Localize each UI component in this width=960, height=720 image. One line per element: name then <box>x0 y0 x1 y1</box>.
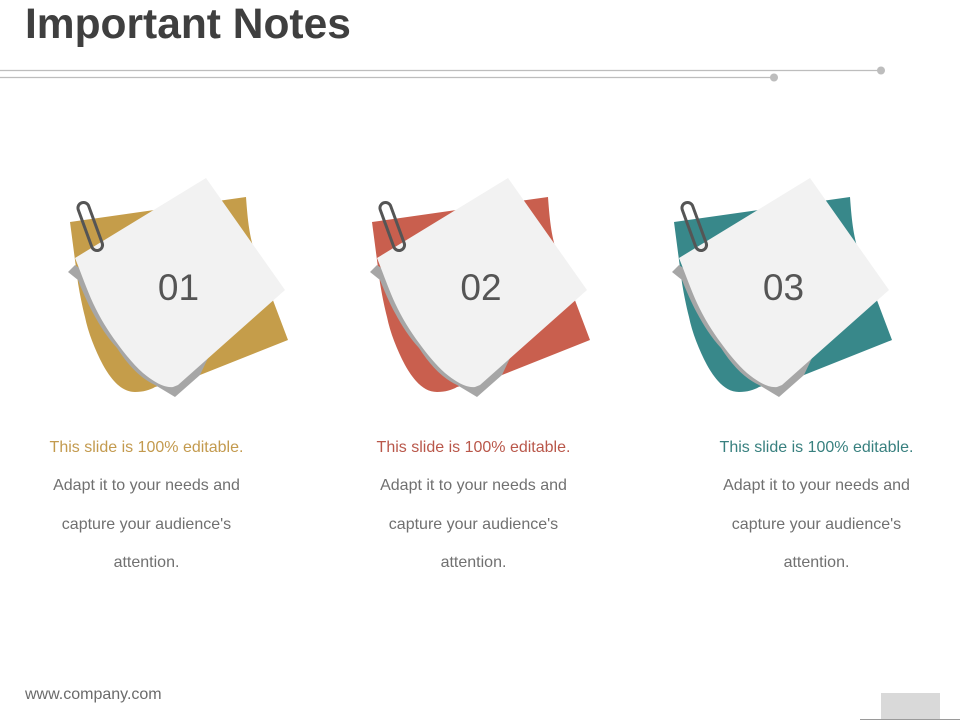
caption 03: This slide is 100% editable. <box>720 439 913 456</box>
back sheet 02 <box>372 197 590 392</box>
number 02: 02 <box>460 267 502 308</box>
caption 03: attention. <box>784 554 849 571</box>
paperclip 03 <box>682 202 707 251</box>
shadow sheet 02 <box>370 265 510 397</box>
caption 02: capture your audience's <box>389 516 558 533</box>
paperclip 02 <box>380 202 405 251</box>
footer tab <box>860 693 960 720</box>
caption 01 <box>50 439 243 571</box>
note 01 <box>68 178 288 397</box>
back sheet 03 <box>674 197 892 392</box>
front sheet 03 <box>679 178 889 387</box>
number 03: 03 <box>763 267 804 308</box>
caption 01: Adapt it to your needs and <box>53 477 240 494</box>
note 03 <box>672 178 892 397</box>
caption 01: This slide is 100% editable. <box>50 439 243 456</box>
footer url: www.company.com <box>25 686 162 703</box>
caption 03: Adapt it to your needs and <box>723 477 910 494</box>
title: Important Notes <box>25 1 351 48</box>
front sheet 01 <box>75 178 285 387</box>
caption 02: attention. <box>441 554 506 571</box>
number 01: 01 <box>158 267 199 308</box>
shadow sheet 03 <box>672 265 812 397</box>
caption 03 <box>720 439 913 571</box>
caption 01: capture your audience's <box>62 516 231 533</box>
caption 02: Adapt it to your needs and <box>380 477 567 494</box>
caption 03: capture your audience's <box>732 516 901 533</box>
paperclip 01 <box>78 202 103 251</box>
shadow sheet 01 <box>68 265 208 397</box>
caption 01: attention. <box>114 554 179 571</box>
note 02 <box>370 178 590 397</box>
caption 02 <box>376 439 570 571</box>
caption 02: This slide is 100% editable. <box>377 439 570 456</box>
back sheet 01 <box>70 197 288 392</box>
front sheet 02 <box>377 178 587 387</box>
